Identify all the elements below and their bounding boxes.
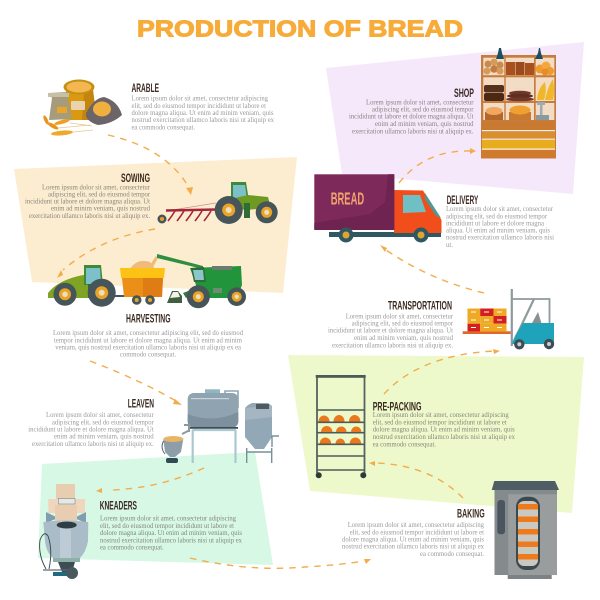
- text: sowing body: [25, 184, 151, 220]
- arrow: baking to pre-packing: [369, 461, 463, 498]
- heading: leaven: LEAVEN: [128, 397, 154, 411]
- icon: tractor, trailer and combine harvester: [48, 254, 246, 308]
- arrow: harvesting to leaven: [90, 361, 182, 405]
- text: leaven body: enim ad minim veniam, quis nostrud: [54, 434, 154, 441]
- text: kneaders body: dolore magna aliqua. Ut enim ad minim veniam, quis: [100, 530, 242, 537]
- text: sowing body: incididunt ut labore et dolore magna aliqua. Ut: [25, 199, 150, 206]
- text: arable body: dolore magna aliqua. Ut enim ad minim veniam, quis: [132, 110, 274, 117]
- text: baking body: Lorem ipsum dolor sit amet, consectetur adipiscing: [348, 522, 485, 529]
- icon: bread oven: [492, 481, 559, 579]
- text: leaven body: [28, 412, 154, 448]
- text: delivery body: adipiscing elit, sed do eiusmod tempor: [446, 213, 548, 220]
- text: delivery body: nostrud exercitation ullamco laboris nisi: [446, 235, 554, 242]
- text: kneaders body: [100, 516, 243, 552]
- text: transportation body: [328, 313, 454, 349]
- label: bread on truck: BREAD: [331, 188, 364, 208]
- text: delivery body: [446, 206, 554, 249]
- text: delivery body: aliqua. Ut enim ad minim veniam, quis: [446, 227, 550, 234]
- icon: bakery shop shelves: [481, 48, 556, 158]
- text: pre-packing body: Lorem ipsum dolor sit amet, consectetur adipiscing: [373, 412, 509, 419]
- text: arable body: ea commodo consequat.: [132, 124, 195, 132]
- heading: harvesting: HARVESTING: [126, 311, 170, 325]
- text: transportation body: adipiscing elit, sed do eiusmod tempor: [352, 321, 454, 328]
- text: harvesting body: Lorem ipsum dolor sit amet, consectetur adipiscing elit, sed do eiusmod: [53, 330, 244, 337]
- icon: rack with bread loaves: [316, 375, 366, 478]
- icon: tractor with plough: [158, 182, 278, 224]
- text: shop body: enim ad minim veniam, quis nostrud: [375, 121, 474, 128]
- icon: dough kneader machine: [40, 484, 88, 579]
- heading: shop: SHOP: [454, 86, 474, 100]
- text: baking body: nostrud exercitation ullamco laboris nisi ut aliquip ex: [342, 544, 485, 551]
- arrow: delivery to shop: [399, 148, 476, 183]
- text: leaven body: adipiscing elit, sed do eiusmod tempor: [52, 419, 154, 426]
- panel: shop background: [326, 42, 584, 194]
- text: leaven body: exercitation ullamco laboris nisi ut aliquip ex.: [32, 441, 154, 448]
- arrow: kneaders to baking: [190, 558, 371, 568]
- text: leaven body: Lorem ipsum dolor sit amet, consectetur: [46, 412, 154, 419]
- text: arable body: nostrud exercitation ullamco laboris nisi ut aliquip ex: [132, 117, 275, 124]
- heading: baking: BAKING: [457, 506, 485, 520]
- text: kneaders body: elit, sed do eiusmod tempor incididunt ut labore et: [100, 523, 234, 530]
- text: sowing body: adipiscing elit, sed do eiusmod tempor: [48, 192, 151, 198]
- text: shop body: incididunt ut labore et dolore magna aliqua. Ut: [349, 114, 474, 121]
- panel: pre-packing background: [288, 355, 584, 513]
- text: pre-packing body: elit, sed do eiusmod tempor incididunt ut labore et: [373, 419, 507, 426]
- text: baking body: ea commodo consequat.: [420, 551, 484, 558]
- arrow: leaven to kneaders: [96, 468, 204, 493]
- text: pre-packing body: nostrud exercitation ullamco laboris nisi ut aliquip ex: [373, 434, 516, 441]
- text: baking body: elit, sed do eiusmod tempor incididunt ut labore et: [350, 529, 484, 536]
- text: delivery body: ut.: [446, 242, 453, 249]
- text: harvesting body: tempor incididunt ut labore et dolore magna aliqua. Ut enim ad minim: [54, 337, 243, 344]
- text: shop body: exercitation ullamco laboris nisi ut aliquip ex.: [352, 128, 474, 135]
- text: transportation body: Lorem ipsum dolor sit amet, consectetur: [346, 313, 454, 320]
- arrow: transportation to delivery: [380, 245, 484, 293]
- text: shop body: [349, 99, 474, 135]
- text: kneaders body: nostrud exercitation ullamco laboris nisi ut aliquip ex: [100, 537, 243, 544]
- text: shop body: Lorem ipsum dolor sit amet, consectetur: [366, 99, 474, 106]
- text: delivery body: Lorem ipsum dolor sit amet, consectetur: [446, 206, 554, 213]
- icon: forklift with crates: [463, 289, 554, 349]
- arrow: arable to sowing: [108, 135, 193, 195]
- text: harvesting body: veniam, quis nostrud exercitation ullamco laboris nisi ut aliquip ex ea: [55, 345, 241, 352]
- heading: sowing: SOWING: [121, 171, 150, 185]
- text: sowing body: Lorem ipsum dolor sit amet, consectetur: [42, 184, 151, 191]
- heading: arable: ARABLE: [132, 81, 159, 95]
- heading: pre-packing: PRE-PACKING: [373, 400, 422, 414]
- title: PRODUCTION OF BREAD: [137, 16, 463, 42]
- text: arable body: elit, sed do eiusmod tempor incididunt ut labore et: [132, 103, 266, 110]
- text: transportation body: incididunt ut labore et dolore magna aliqua. Ut: [328, 328, 453, 335]
- heading: transportation: TRANSPORTATION: [388, 298, 452, 312]
- text: arable body: [132, 96, 275, 132]
- panel: sowing background: [14, 157, 297, 293]
- icon: delivery truck: [314, 174, 442, 242]
- text: pre-packing body: [373, 412, 516, 448]
- text: sowing body: enim ad minim veniam, quis nostrud: [51, 206, 151, 213]
- text: baking body: dolore magna aliqua. Ut enim ad minim veniam, quis: [342, 537, 484, 544]
- text: shop body: adipiscing elit, sed do eiusmod tempor: [372, 107, 474, 114]
- text: kneaders body: ea commodo consequat.: [100, 545, 164, 552]
- text: harvesting body: [53, 330, 244, 359]
- arrow: sowing to harvesting: [57, 229, 155, 278]
- text: pre-packing body: ea commodo consequat.: [373, 441, 436, 448]
- text: kneaders body: Lorem ipsum dolor sit amet, consectetur adipiscing: [100, 516, 237, 523]
- heading: delivery: DELIVERY: [447, 193, 478, 207]
- text: delivery body: incididunt ut labore et dolore magna: [446, 220, 544, 227]
- arrow: pre-packing to transportation: [384, 349, 500, 394]
- text: arable body: Lorem ipsum dolor sit amet, consectetur adipiscing: [132, 96, 269, 102]
- text: leaven body: incididunt ut labore et dolore magna aliqua. Ut: [28, 426, 154, 433]
- text: transportation body: enim ad minim veniam, quis nostrud: [354, 335, 454, 342]
- text: transportation body: exercitation ullamco laboris nisi ut aliquip ex.: [332, 342, 453, 349]
- text: pre-packing body: dolore magna aliqua. Ut enim ad minim veniam, quis: [373, 427, 515, 434]
- text: harvesting body: commodo consequat.: [120, 352, 176, 359]
- heading: kneaders: KNEADERS: [100, 499, 137, 513]
- text: sowing body: exercitation ullamco laboris nisi ut aliquip ex.: [29, 213, 150, 220]
- panel: kneaders background: [38, 452, 273, 565]
- icon: leaven tanks: [162, 389, 279, 463]
- text: baking body: [342, 522, 485, 558]
- icon: grain sacks and wheat: [42, 80, 122, 136]
